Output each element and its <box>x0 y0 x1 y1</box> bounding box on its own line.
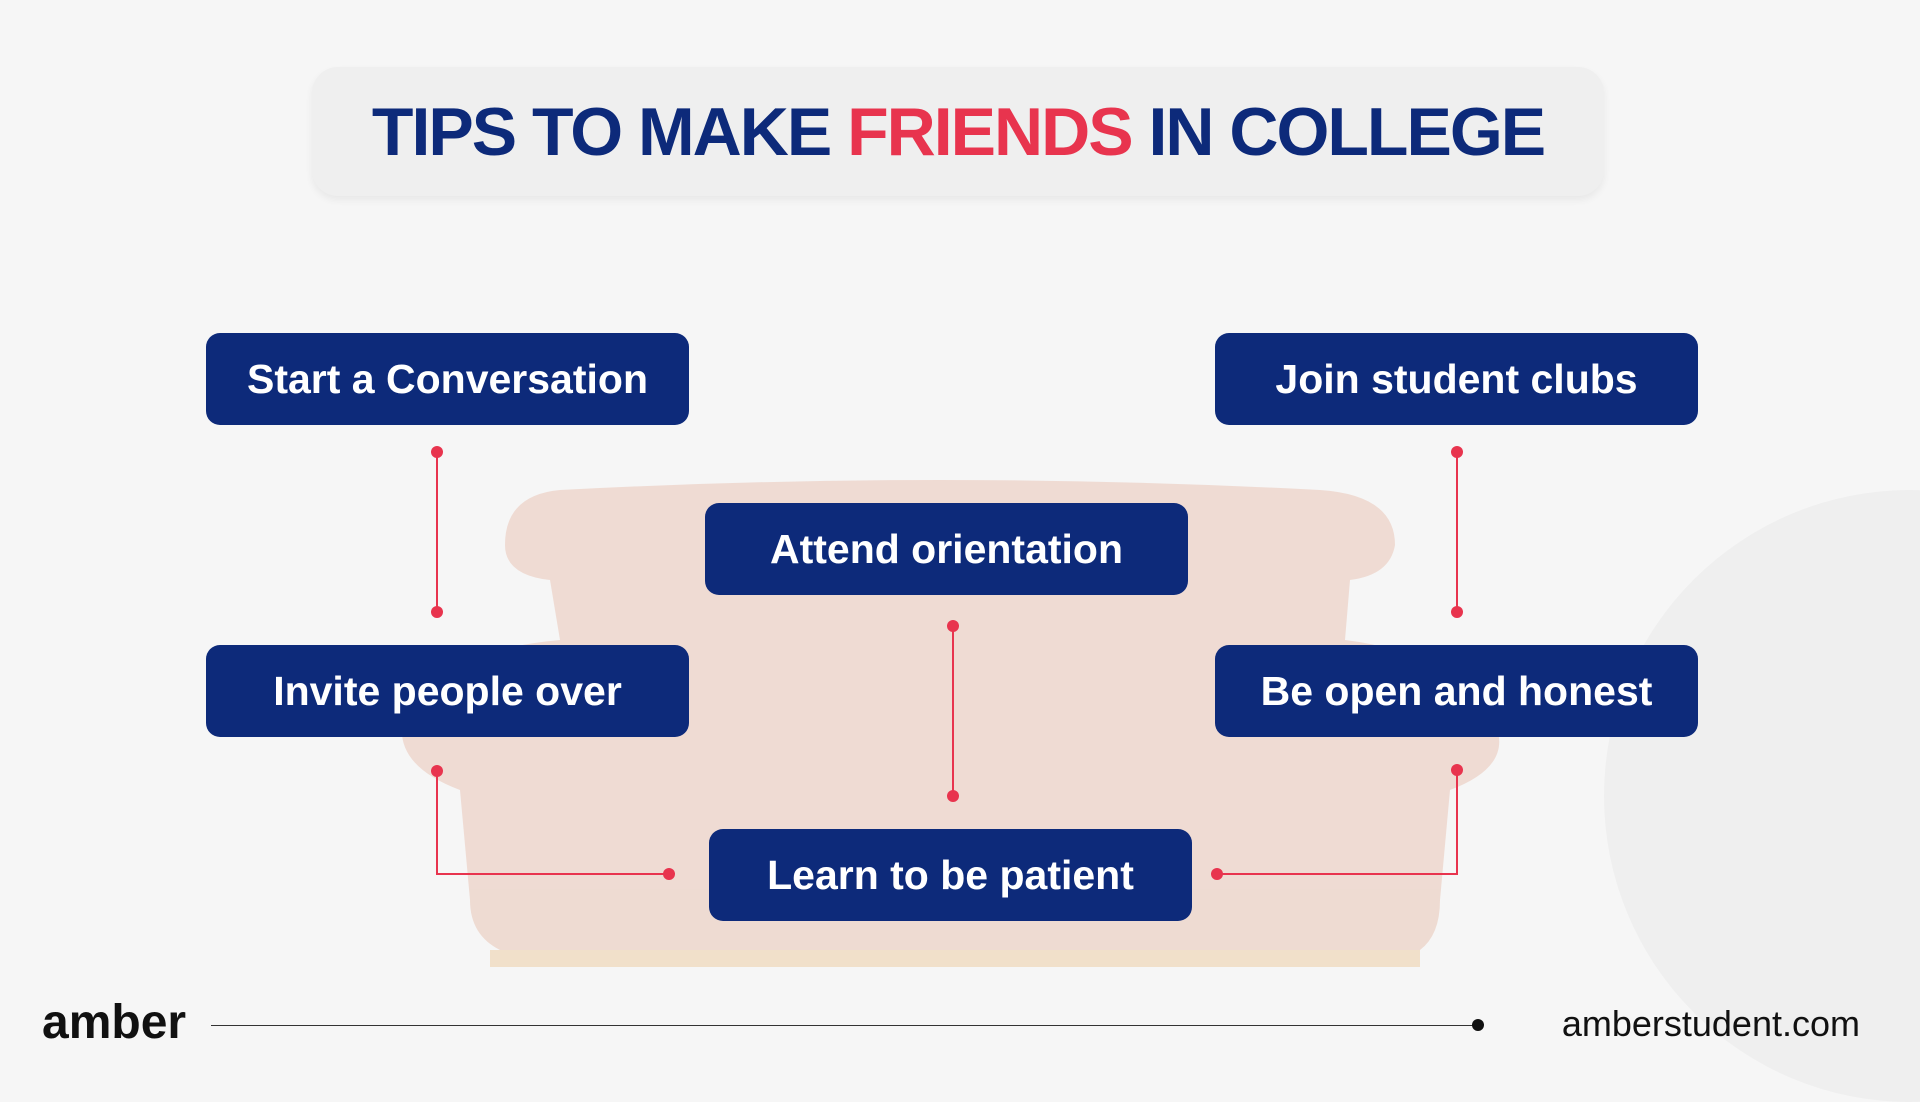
footer logo: amber <box>42 996 186 1049</box>
tip: join student clubs <box>1215 333 1698 425</box>
background circle <box>1604 490 1920 1102</box>
tip: be open and honest <box>1215 645 1698 737</box>
tip: invite people over: Invite people over <box>273 668 622 714</box>
tip: invite people over <box>206 645 689 737</box>
tip: attend orientation: Attend orientation <box>770 526 1123 572</box>
footer line <box>211 1025 1478 1026</box>
title panel: TIPS TO MAKE IN COLLEGE <box>372 94 1544 170</box>
tip: learn to be patient <box>709 829 1192 921</box>
tip: learn to be patient: Learn to be patient <box>767 852 1134 898</box>
title panel <box>312 67 1604 196</box>
tip: start a conversation <box>206 333 689 425</box>
title panel: FRIENDS <box>847 94 1132 170</box>
tip: join student clubs: Join student clubs <box>1275 356 1638 402</box>
tip: be open and honest: Be open and honest <box>1261 668 1652 714</box>
tip: attend orientation <box>705 503 1188 595</box>
tip: start a conversation: Start a Conversation <box>247 356 648 402</box>
footer url: amberstudent.com <box>1562 1003 1860 1044</box>
